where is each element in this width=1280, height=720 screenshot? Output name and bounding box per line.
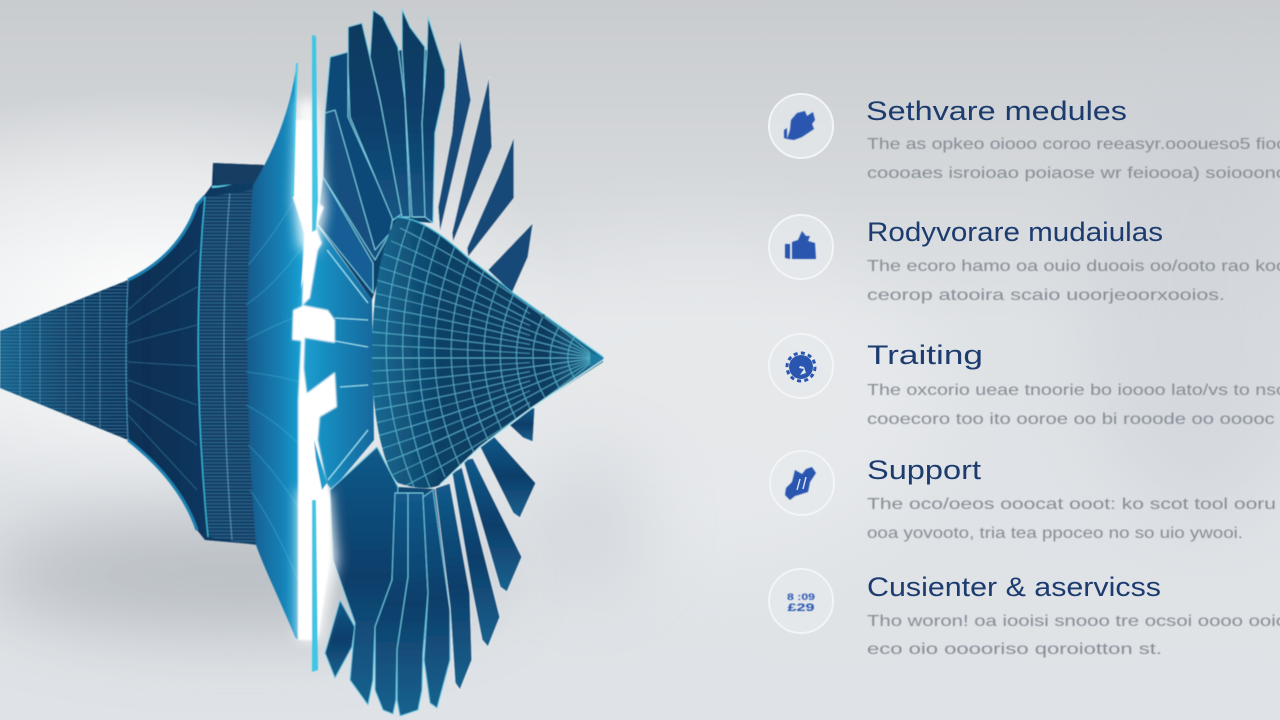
item: Software modules [769, 94, 1280, 182]
heading: Traiting [867, 340, 983, 370]
item: Training [769, 334, 1280, 428]
icon: wrench badge [770, 451, 834, 515]
heading: Cusienter & aservicss [867, 572, 1161, 602]
icon: thumb badge [769, 215, 833, 279]
icon: gear badge [769, 334, 833, 398]
description: Tho woron! oa iooisi snooo tre ocsoi oooo ooio [867, 613, 1280, 630]
description [867, 496, 1276, 542]
description [867, 136, 1280, 182]
item: Support [770, 451, 1276, 542]
heading: Sethvare medules [866, 96, 1127, 126]
flared section left of flash [246, 63, 305, 640]
drum ring [190, 163, 264, 550]
feature list [769, 94, 1280, 658]
wireframe hub [372, 217, 604, 490]
turbine illustration [0, 9, 604, 716]
icon: data badge: 8 :09 [787, 592, 815, 602]
description: The oxcorio ueae tnoorie bo ioooo lato/vs to nso [867, 382, 1280, 399]
item: Hardware modules [769, 215, 1280, 304]
description: cooecoro too ito ooroe oo bi rooode oo ooooc r [867, 411, 1280, 428]
icon: modules badge [769, 94, 833, 158]
description [867, 382, 1280, 428]
description: The oco/oeos ooocat ooot: ko scot tool ooru [867, 496, 1276, 513]
description: coooaes isroioao poiaose wr feioooa) soiooono [867, 165, 1280, 182]
description: ceorop atooira scaio uoorjeoorxooios. [867, 287, 1225, 304]
upper blades [317, 9, 445, 300]
heading: Rodyvorare mudaiulas [867, 217, 1163, 247]
description [867, 613, 1280, 658]
left cone [0, 163, 264, 545]
item: Customer & services [769, 569, 1280, 658]
heading: Support [867, 455, 982, 485]
description: The ecoro hamo oa ouio duoois oo/ooto rao koo [867, 258, 1280, 275]
inner panels right of flash [298, 225, 374, 490]
description: The as opkeo oiooo coroo reeasyr.oooueso5 fioo [867, 136, 1280, 153]
icon: data badge [769, 569, 833, 633]
description: eco oio ooooriso qoroiotton st. [867, 641, 1162, 658]
description: ooa yovooto, tria tea ppoceo no so uio ywooi. [867, 525, 1243, 542]
glowing flash [292, 35, 338, 672]
description [867, 258, 1280, 304]
lower blades [325, 447, 470, 716]
icon: data badge: £29 [788, 602, 814, 614]
